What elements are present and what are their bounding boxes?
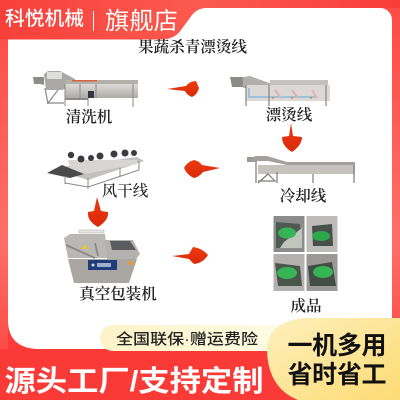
arrow: to blanching	[167, 81, 199, 97]
label: drying: 风干线	[102, 182, 149, 200]
finished product photos	[273, 215, 338, 291]
warranty pill	[100, 325, 300, 351]
arrow: to cooling	[282, 123, 302, 152]
label: blanching: 漂烫线	[266, 105, 313, 124]
title: 果蔬杀青漂烫线	[138, 37, 247, 56]
label: washer: 清洗机	[66, 107, 113, 126]
vacuum packing machine	[64, 230, 140, 283]
arrow: to vacuum packer	[88, 197, 108, 227]
arrow: to finished product	[172, 247, 208, 264]
feature panel	[267, 318, 400, 400]
feature line 1: 一机多用	[288, 332, 386, 360]
drying machine	[47, 150, 144, 189]
product photo 1	[274, 216, 304, 252]
product photo 3	[274, 254, 304, 291]
blanching machine	[230, 76, 330, 106]
label: packer: 真空包装机	[79, 284, 157, 303]
header divider	[93, 11, 94, 31]
arrow: to drying	[184, 160, 220, 178]
label: cooling: 冷却线	[280, 186, 327, 205]
product photo 2	[306, 216, 338, 252]
header banner	[0, 0, 400, 40]
factory slogan: 源头工厂/支持定制	[4, 365, 264, 398]
cooling machine	[247, 156, 355, 183]
warranty pill: 全国联保·赠运费险	[116, 330, 258, 348]
label: finished product: 成品	[290, 297, 322, 315]
header shop text: 旗舰店	[105, 8, 178, 35]
header brand text: 科悦机械	[5, 8, 84, 30]
washing machine	[33, 71, 138, 107]
feature line 2: 省时省工	[288, 361, 386, 389]
product photo 4	[306, 254, 338, 291]
